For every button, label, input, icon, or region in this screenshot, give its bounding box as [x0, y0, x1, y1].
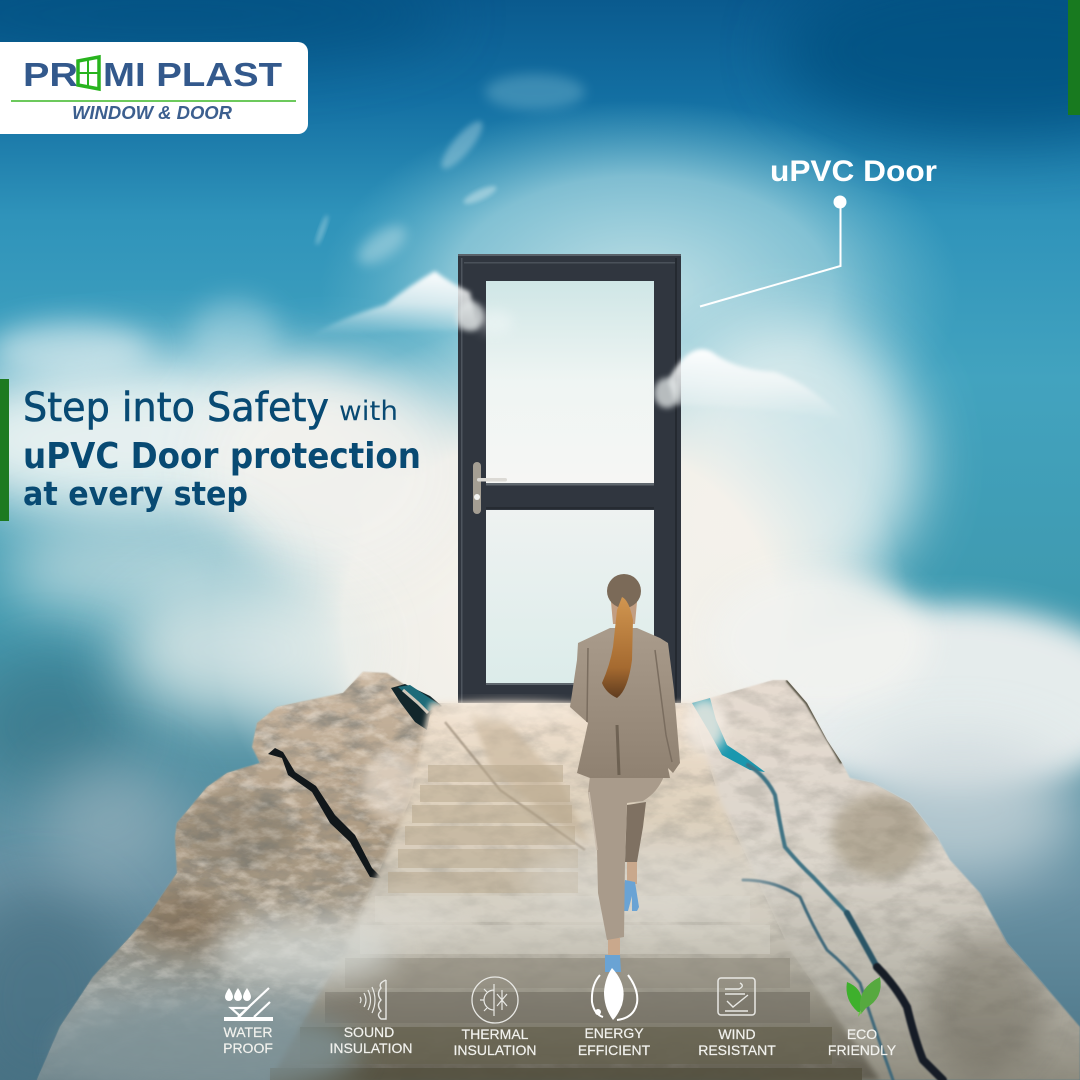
woman walking [570, 574, 680, 972]
feature: thermal insulation: INSULATION [454, 1042, 536, 1058]
mountain: right rock [670, 670, 1080, 1080]
feature: eco friendly: ECO [847, 1026, 877, 1042]
feature icons row [223, 968, 897, 1058]
feature: water proof [223, 988, 273, 1056]
headline: Step into Safety [23, 385, 329, 431]
clouds around door [310, 271, 845, 420]
logo tagline: WINDOW & DOOR [72, 103, 232, 123]
far foot [627, 860, 637, 884]
callout: uPVC Door [700, 155, 937, 306]
feature: wind resistant [698, 978, 776, 1058]
top right accent bar [1068, 0, 1080, 115]
feature: energy efficient: EFFICIENT [578, 1042, 651, 1058]
headline: with [339, 396, 398, 427]
near shoe [605, 955, 621, 972]
door glass upper [486, 281, 654, 483]
rock crack [268, 748, 383, 879]
mountain: left rock [36, 671, 442, 1080]
far leg [625, 802, 646, 862]
right cloud bank [760, 605, 1080, 795]
near leg and hip [588, 776, 664, 940]
headline: uPVC Door protection [23, 436, 421, 477]
fog [60, 697, 780, 1080]
feature: sound insulation: INSULATION [330, 1040, 412, 1056]
logo wordmark: PR [23, 56, 78, 93]
feature: wind resistant: WIND [718, 1026, 756, 1042]
feature: thermal insulation [454, 977, 536, 1058]
top crack [391, 684, 442, 730]
feature: wind resistant: RESISTANT [698, 1042, 776, 1058]
door handle [473, 462, 507, 514]
feature: sound insulation: SOUND [344, 1024, 394, 1040]
teal cracks on right rock [692, 698, 943, 1080]
feature: water proof: WATER [224, 1024, 272, 1040]
feature: thermal insulation: THERMAL [462, 1026, 529, 1042]
logo panel [0, 42, 308, 134]
feature: eco friendly: FRIENDLY [828, 1042, 897, 1058]
stair rock streaks [445, 722, 585, 850]
stairs [270, 700, 890, 1080]
neck [611, 602, 637, 624]
jacket [570, 628, 680, 778]
head [607, 574, 641, 608]
ponytail [602, 597, 633, 698]
far shoe [623, 880, 639, 911]
logo panel: MI PLAST [103, 56, 282, 93]
feature: eco friendly [828, 977, 897, 1058]
left cloud bank [0, 355, 370, 525]
callout: uPVC Door: uPVC Door [770, 155, 937, 188]
feature: energy efficient: ENERGY [584, 1025, 644, 1041]
logo window icon [78, 57, 99, 89]
lower left shadow sky [0, 655, 130, 795]
feature: sound insulation [330, 980, 412, 1056]
sky wisps [485, 74, 585, 110]
headline: at every step [23, 474, 248, 513]
feature: water proof: PROOF [223, 1040, 273, 1056]
door [458, 254, 681, 703]
near foot [608, 938, 620, 958]
left accent bar [0, 379, 9, 521]
door glass lower [486, 510, 654, 683]
headline [23, 385, 421, 513]
feature: energy efficient [578, 968, 651, 1058]
